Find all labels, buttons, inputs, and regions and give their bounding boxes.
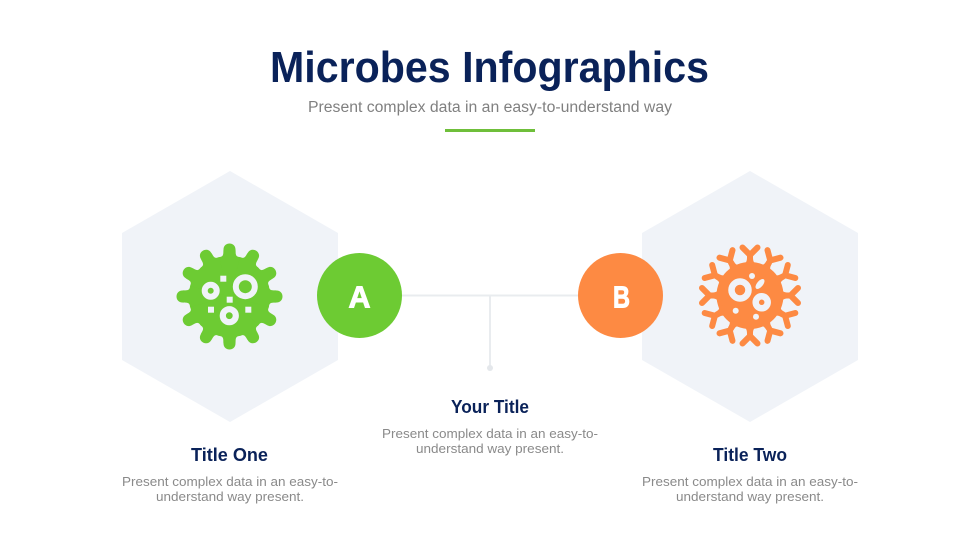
- badge B: [578, 253, 663, 338]
- text block: Your Title: Present complex data in an easy-to-: [382, 427, 598, 441]
- text block: Your Title: Your Title: [451, 396, 529, 417]
- text block: Your Title: [382, 396, 598, 456]
- badge A: A: [348, 279, 370, 314]
- connector lines: [400, 296, 580, 371]
- text block: Title One: Present complex data in an easy-to-: [122, 475, 338, 489]
- panel: hexagon B: [642, 171, 858, 422]
- text block: Title Two: understand way present.: [676, 490, 824, 504]
- subtitle: Present complex data in an easy-to-understand way: [308, 99, 672, 116]
- panel: hexagon A: [122, 171, 338, 422]
- title: Microbes Infographics: [270, 43, 709, 92]
- badge B: B: [613, 279, 630, 314]
- text block: Title One: Title One: [191, 444, 268, 465]
- text block: Title One: [122, 444, 338, 504]
- text block: Your Title: understand way present.: [416, 442, 564, 456]
- icon: orange microbe: [702, 248, 798, 344]
- text block: Title Two: Title Two: [713, 444, 787, 465]
- text block: Title Two: [642, 444, 858, 504]
- badge A: [317, 253, 402, 338]
- icon: green microbe: [176, 244, 282, 350]
- text block: Title One: understand way present.: [156, 490, 304, 504]
- text block: Title Two: Present complex data in an easy-to-: [642, 475, 858, 489]
- title underline: [445, 129, 535, 132]
